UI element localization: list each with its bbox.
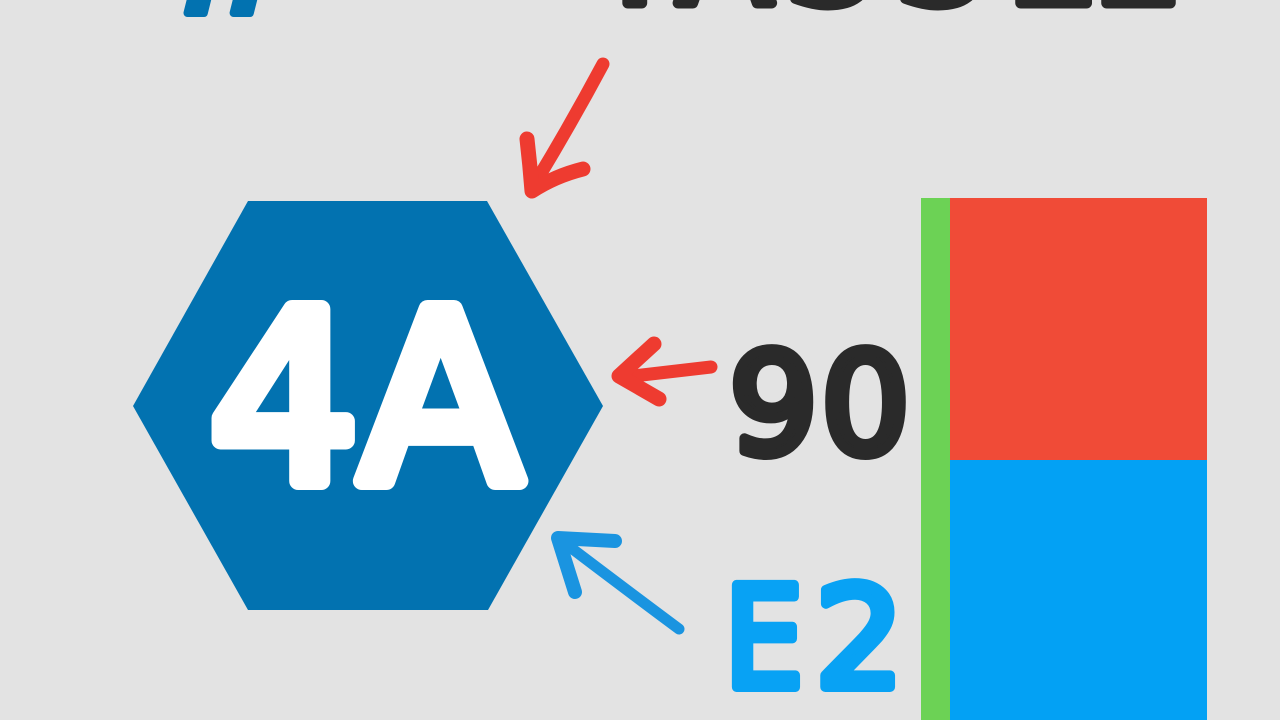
blue block bbox=[950, 460, 1207, 720]
label E2: 2 bbox=[815, 558, 904, 720]
arrow: blue pointing to hexagon lower right bbox=[558, 538, 679, 629]
label E2 bbox=[724, 558, 904, 720]
label E2: E bbox=[724, 558, 804, 720]
hexagon badge bbox=[133, 201, 603, 610]
red block bbox=[950, 198, 1207, 460]
hexagon label: 4A bbox=[209, 262, 521, 537]
arrow: red pointing to hexagon right bbox=[619, 344, 711, 399]
number label 90: 90 bbox=[729, 324, 910, 487]
stacked colour bar bbox=[921, 198, 1207, 720]
arrow: red pointing to hexagon top bbox=[527, 64, 603, 191]
green strip bbox=[921, 198, 950, 720]
